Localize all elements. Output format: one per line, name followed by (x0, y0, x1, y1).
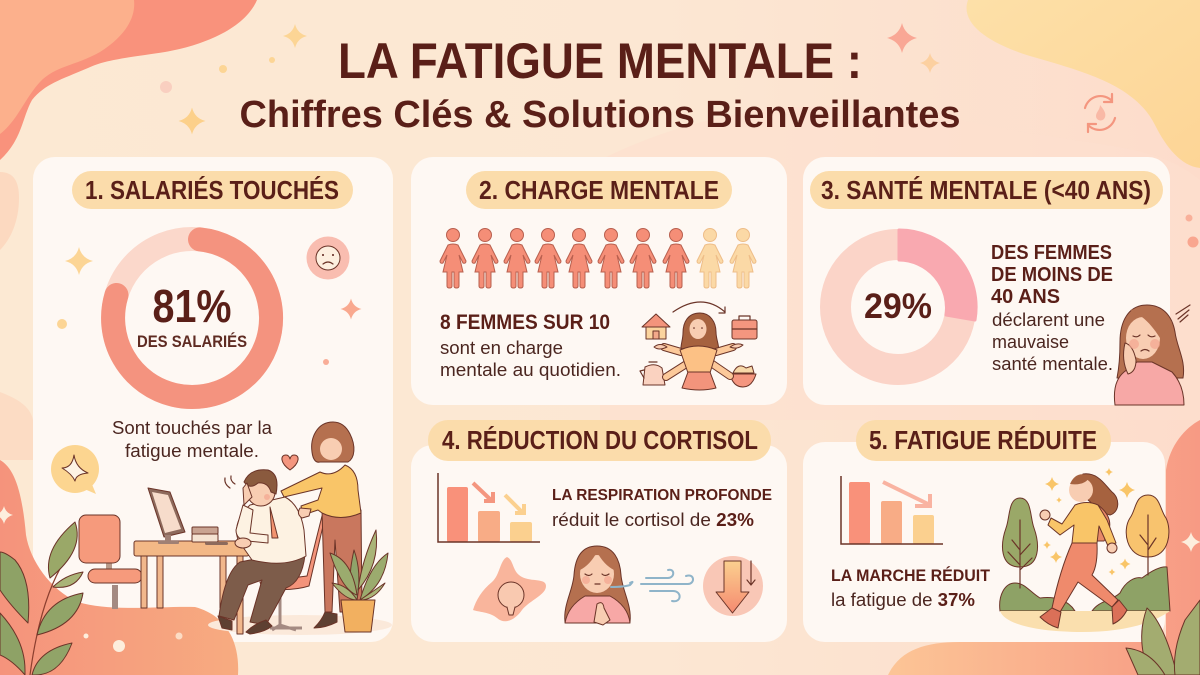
icon: refresh flame (1085, 94, 1115, 132)
panel 3: santé mentale (803, 157, 1190, 405)
text: femmes de moins de 40 ans: DE MOINS DE (991, 264, 1113, 286)
icon: house (642, 314, 670, 339)
icon: sad face (306, 236, 350, 280)
bar chart: fatigue (841, 476, 943, 544)
panel 5: fatigue réduite (803, 420, 1170, 642)
text: femmes de moins de 40 ans: mauvaise (992, 332, 1069, 352)
woman body (654, 313, 743, 390)
heading 3: 3. SANTÉ MENTALE (<40 ANS) (821, 175, 1151, 205)
text: touchés: fatigue mentale. (125, 441, 259, 461)
heading 2: 2. CHARGE MENTALE (479, 175, 719, 205)
text: femmes de moins de 40 ans: DES FEMMES (991, 242, 1112, 264)
text: respiration profonde (552, 487, 772, 530)
illustration: tired woman (1114, 305, 1190, 405)
text: femmes de moins de 40 ans (991, 242, 1113, 374)
icon: heart (282, 455, 298, 470)
sparkles around donut (57, 247, 362, 365)
walking figure (1040, 474, 1127, 628)
panel 2: charge mentale (411, 157, 787, 405)
donut chart 29% (836, 230, 976, 370)
heading 4: 4. RÉDUCTION DU CORTISOL (442, 425, 758, 455)
text: touchés: Sont touchés par la (112, 418, 273, 438)
icon: down arrow circle (703, 556, 763, 616)
potted plant (330, 530, 388, 632)
heading 4 (428, 420, 771, 461)
office chair (260, 516, 323, 630)
text: femmes de moins de 40 ans: 40 ANS (991, 286, 1060, 308)
decorative blob: top right (967, 0, 1200, 168)
text: la marche (831, 566, 991, 610)
text: 8 femmes sur 10: sont en charge (440, 338, 563, 358)
left foliage (0, 522, 83, 675)
text: femmes de moins de 40 ans: santé mentale. (992, 354, 1113, 374)
heading 5 (856, 420, 1111, 461)
heading 1: 1. SALARIÉS TOUCHÉS (85, 175, 339, 205)
illustration: juggling woman (640, 302, 757, 390)
text: 8 femmes sur 10 (440, 311, 621, 380)
donut chart 81% (113, 239, 271, 397)
decorative sparkles and dots (160, 23, 1200, 552)
text: respiration profonde: réduit le cortisol de 23% (552, 510, 754, 530)
man with head in hand (218, 470, 306, 634)
sparkles (1043, 468, 1135, 576)
text: respiration profonde: LA RESPIRATION PROFONDE (552, 487, 772, 504)
text: 8 femmes sur 10: 8 FEMMES SUR 10 (440, 311, 610, 334)
donut chart 81%: DES SALARIÉS (137, 332, 247, 351)
text: la marche: LA MARCHE RÉDUIT (831, 566, 991, 585)
donut chart 29%: 29% (864, 287, 932, 326)
text: la marche: la fatigue de 37% (831, 590, 975, 610)
monitor and books (148, 488, 228, 545)
arrow (673, 302, 725, 313)
pictogram: 8 of 10 women (440, 228, 756, 288)
trees (1003, 495, 1169, 588)
icon: adrenal gland (473, 557, 546, 621)
icon: speech bubble (51, 445, 99, 494)
desk (134, 541, 249, 634)
icon: kettle (640, 362, 665, 385)
illustration: breathing woman (565, 546, 630, 625)
heading 5: 5. FATIGUE RÉDUITE (869, 425, 1097, 455)
icon: bowl (730, 366, 756, 387)
illustration: walking woman in park (1000, 468, 1170, 632)
text: touchés (112, 418, 273, 461)
bar chart: cortisol (438, 473, 540, 542)
title: LA FATIGUE MENTALE : (338, 33, 862, 89)
icon: breath wind (611, 570, 693, 601)
title: Chiffres Clés & Solutions Bienveillantes (240, 94, 960, 136)
panel 1: salariés touchés (33, 157, 393, 642)
ground and bushes (1000, 567, 1170, 632)
panel 4: réduction du cortisol (411, 420, 787, 642)
donut chart 81%: 81% (152, 280, 232, 332)
decorative blob: bottom right (888, 420, 1200, 675)
woman comforting (281, 422, 362, 628)
text: 8 femmes sur 10: mentale au quotidien. (440, 360, 621, 380)
decorative blob: bottom left (0, 460, 238, 675)
title (240, 33, 960, 136)
decorative blob: top left (0, 0, 257, 160)
empty chair (79, 515, 142, 609)
icon: briefcase (732, 316, 757, 339)
illustration: office scene (79, 422, 392, 635)
text: femmes de moins de 40 ans: déclarent une (992, 310, 1105, 330)
right foliage (1126, 600, 1200, 675)
